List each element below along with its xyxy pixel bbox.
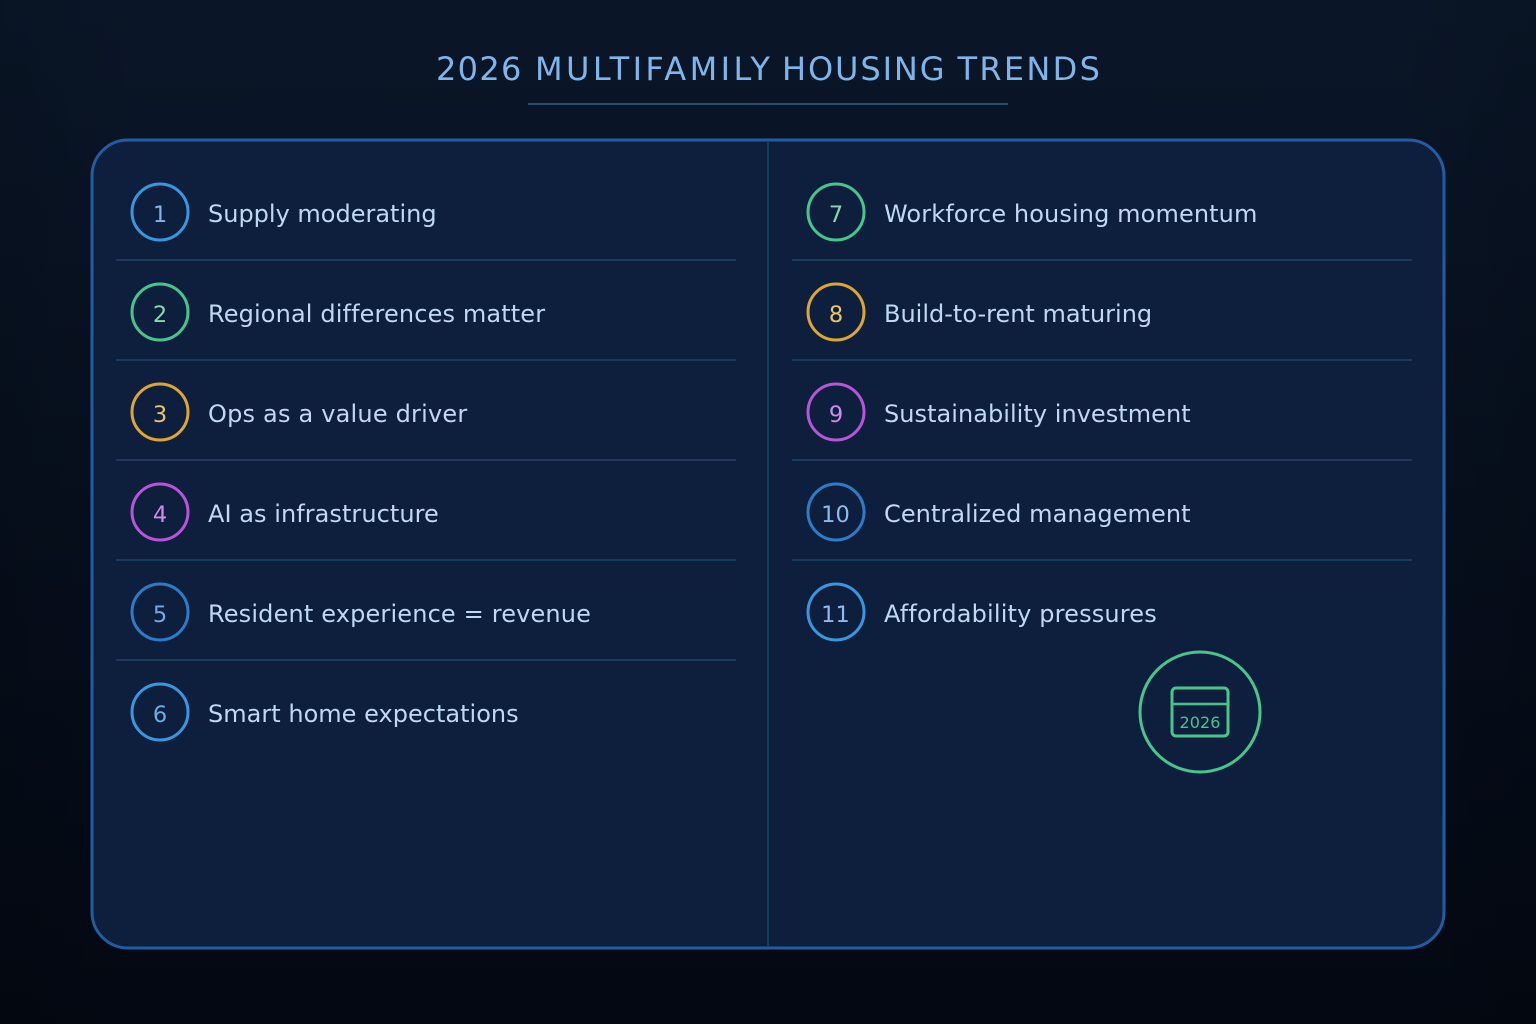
- title: 2026: [436, 50, 534, 88]
- trend 4: AI as infrastructure: [208, 500, 439, 528]
- trend 1: [132, 184, 437, 240]
- trend 7: [808, 184, 1257, 240]
- trend 9: Sustainability investment: [884, 400, 1191, 428]
- trend 9: 9: [829, 402, 843, 428]
- trend 2: 2: [153, 302, 167, 328]
- trend 11: 11: [821, 602, 850, 628]
- trend 6: Smart home expectations: [208, 700, 519, 728]
- trend 7: Workforce housing momentum: [884, 200, 1257, 228]
- trend 10: Centralized management: [884, 500, 1191, 528]
- trend 11: [808, 584, 1157, 640]
- trend 6: [132, 684, 519, 740]
- icon: 2026 calendar: 2026: [1179, 713, 1221, 732]
- trend 4: [132, 484, 439, 540]
- trend 6: 6: [153, 702, 167, 728]
- trend 3: [132, 384, 467, 440]
- trend 10: [808, 484, 1191, 540]
- trend 2: [132, 284, 545, 340]
- trend 11: Affordability pressures: [884, 600, 1157, 628]
- title: HOUSING: [782, 50, 959, 88]
- trend 3: 3: [153, 402, 167, 428]
- trend 4: 4: [153, 502, 167, 528]
- title: TRENDS: [956, 50, 1102, 88]
- trend 2: Regional differences matter: [208, 300, 545, 328]
- title: MULTIFAMILY: [535, 50, 787, 88]
- trend 10: 10: [821, 502, 850, 528]
- main panel: [92, 140, 1444, 948]
- trend 5: Resident experience = revenue: [208, 600, 591, 628]
- trend 9: [808, 384, 1191, 440]
- icon: 2026 calendar: [1140, 652, 1260, 772]
- trend 8: 8: [829, 302, 843, 328]
- trend 1: 1: [153, 202, 167, 228]
- trend 7: 7: [829, 202, 843, 228]
- trend 5: 5: [153, 602, 167, 628]
- trend 1: Supply moderating: [208, 200, 437, 228]
- trend 5: [132, 584, 591, 640]
- trend 3: Ops as a value driver: [208, 400, 467, 428]
- trend 8: Build-to-rent maturing: [884, 300, 1152, 328]
- trend 8: [808, 284, 1152, 340]
